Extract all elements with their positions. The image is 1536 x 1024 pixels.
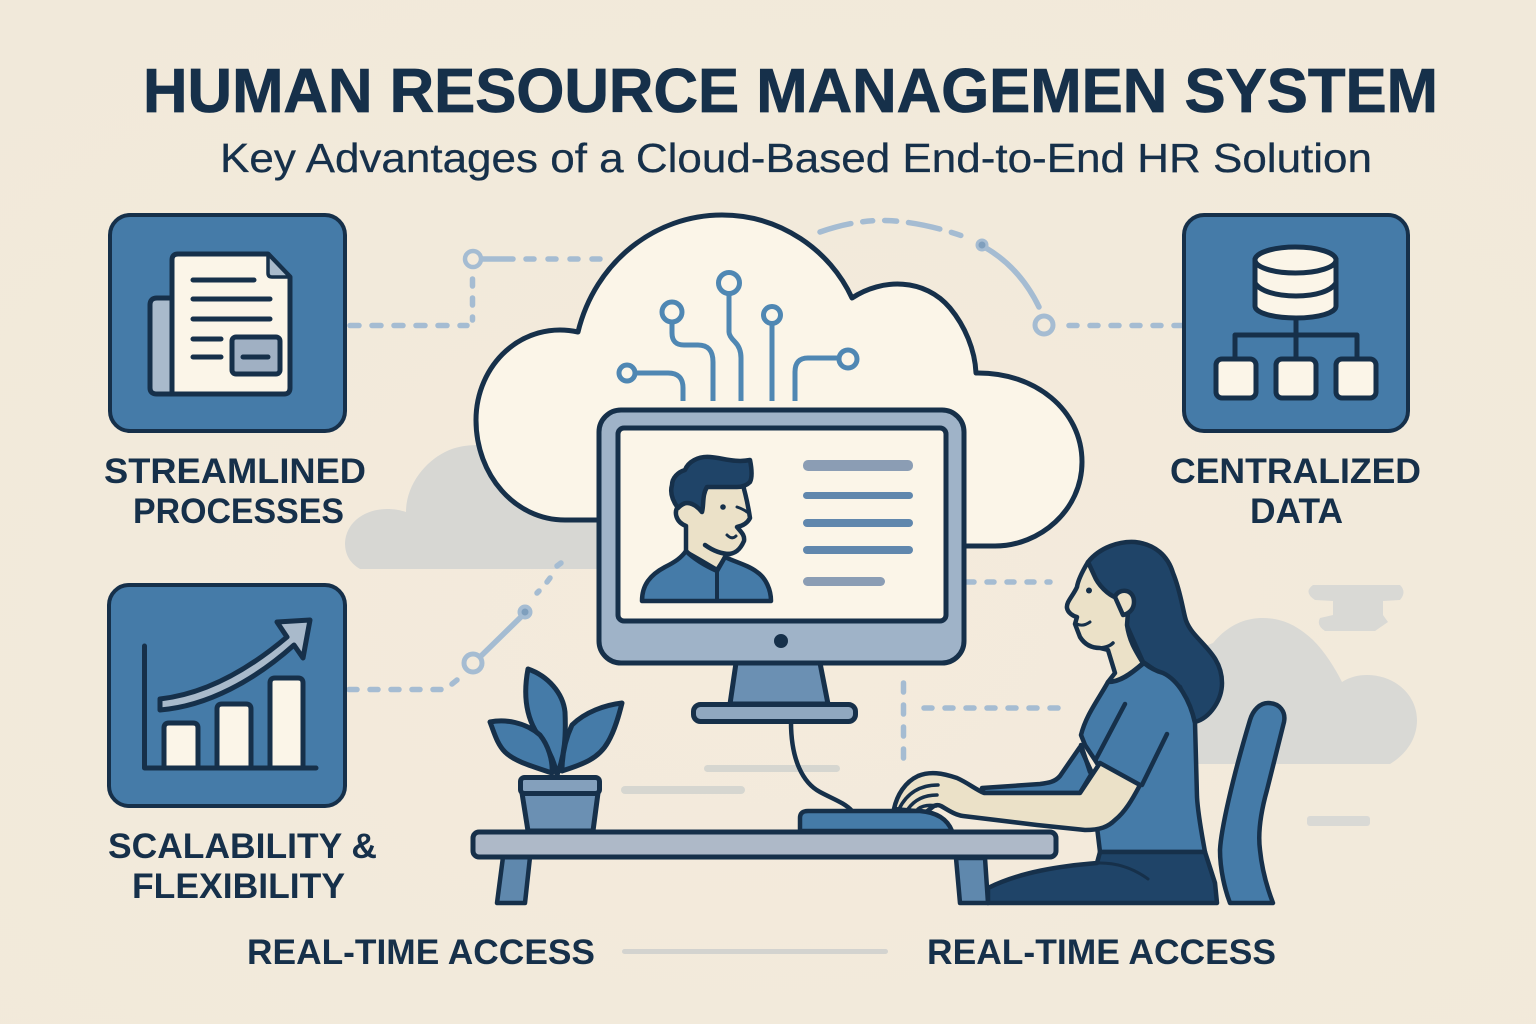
connector: top-right dashed arc: [820, 220, 1183, 334]
panel: scalability icon: [109, 585, 345, 806]
monitor button: [774, 634, 788, 648]
desk: [473, 832, 1056, 903]
label: scalability and flexibility: FLEXIBILITY: [132, 867, 345, 906]
background cloud: left: [345, 445, 598, 569]
panel: streamlined processes icon: [110, 215, 345, 431]
title: HUMAN RESOURCE MANAGEMEN SYSTEM: [143, 57, 1438, 126]
bottom label left: REAL-TIME ACCESS: [247, 933, 595, 972]
woman fingers: [899, 785, 938, 809]
circuit traces: [619, 272, 857, 401]
plant: [490, 669, 622, 831]
connector: bottom-left dashed line: [349, 563, 561, 690]
woman hair: [1088, 542, 1222, 722]
plant pot: [522, 793, 598, 831]
icon: database hierarchy: [1216, 247, 1376, 398]
monitor stand: [730, 663, 828, 704]
panel: centralized data icon: [1184, 215, 1408, 431]
woman near arm and hand: [894, 763, 1140, 830]
label: streamlined processes: [104, 452, 366, 531]
woman ear: [1115, 591, 1134, 615]
icon: growth arrow: [160, 620, 310, 710]
label: scalability and flexibility: SCALABILITY &: [108, 827, 377, 866]
desk top: [473, 832, 1056, 857]
label: centralized data: DATA: [1250, 492, 1343, 531]
label: centralized data: [1170, 452, 1421, 531]
bottom label right: REAL-TIME ACCESS: [927, 933, 1276, 972]
desk shadow bars: [621, 765, 840, 794]
label: streamlined processes: PROCESSES: [133, 492, 344, 531]
desk leg left: [497, 857, 530, 903]
connector: top-left dashed line: [350, 251, 603, 326]
plant leaves: [490, 669, 622, 775]
background cloud: right: [1195, 585, 1417, 826]
subtitle: Key Advantages of a Cloud-Based End-to-End HR Solution: [220, 135, 1372, 181]
monitor: [599, 410, 964, 722]
woman face and neck: [1067, 562, 1143, 682]
monitor base: [694, 704, 856, 722]
woman sleeve lines: [1081, 704, 1167, 785]
monitor screen: [618, 428, 946, 621]
profile text lines: [803, 460, 913, 586]
woman eye and mouth: [1077, 588, 1113, 648]
woman far arm: [982, 747, 1092, 793]
chair: [1220, 703, 1284, 903]
label: scalability and flexibility: [108, 827, 377, 906]
woman torso: [1081, 663, 1205, 852]
cable: [791, 722, 852, 811]
bar chart: [144, 646, 316, 768]
desk leg right: [956, 858, 988, 903]
plant pot rim: [520, 778, 600, 794]
profile portrait: man: [642, 457, 771, 601]
bottom divider line: [622, 949, 888, 954]
icon: back page: [150, 298, 172, 394]
monitor body: [599, 410, 964, 663]
woman at desk: [894, 542, 1222, 903]
label: streamlined processes: STREAMLINED: [104, 452, 366, 491]
icon: document: [172, 254, 290, 394]
keyboard: [800, 811, 952, 831]
central cloud: [476, 215, 1082, 546]
label: centralized data: CENTRALIZED: [1170, 452, 1421, 491]
woman trousers: [988, 852, 1217, 903]
connector: middle-right dashed lines: [904, 582, 1062, 762]
